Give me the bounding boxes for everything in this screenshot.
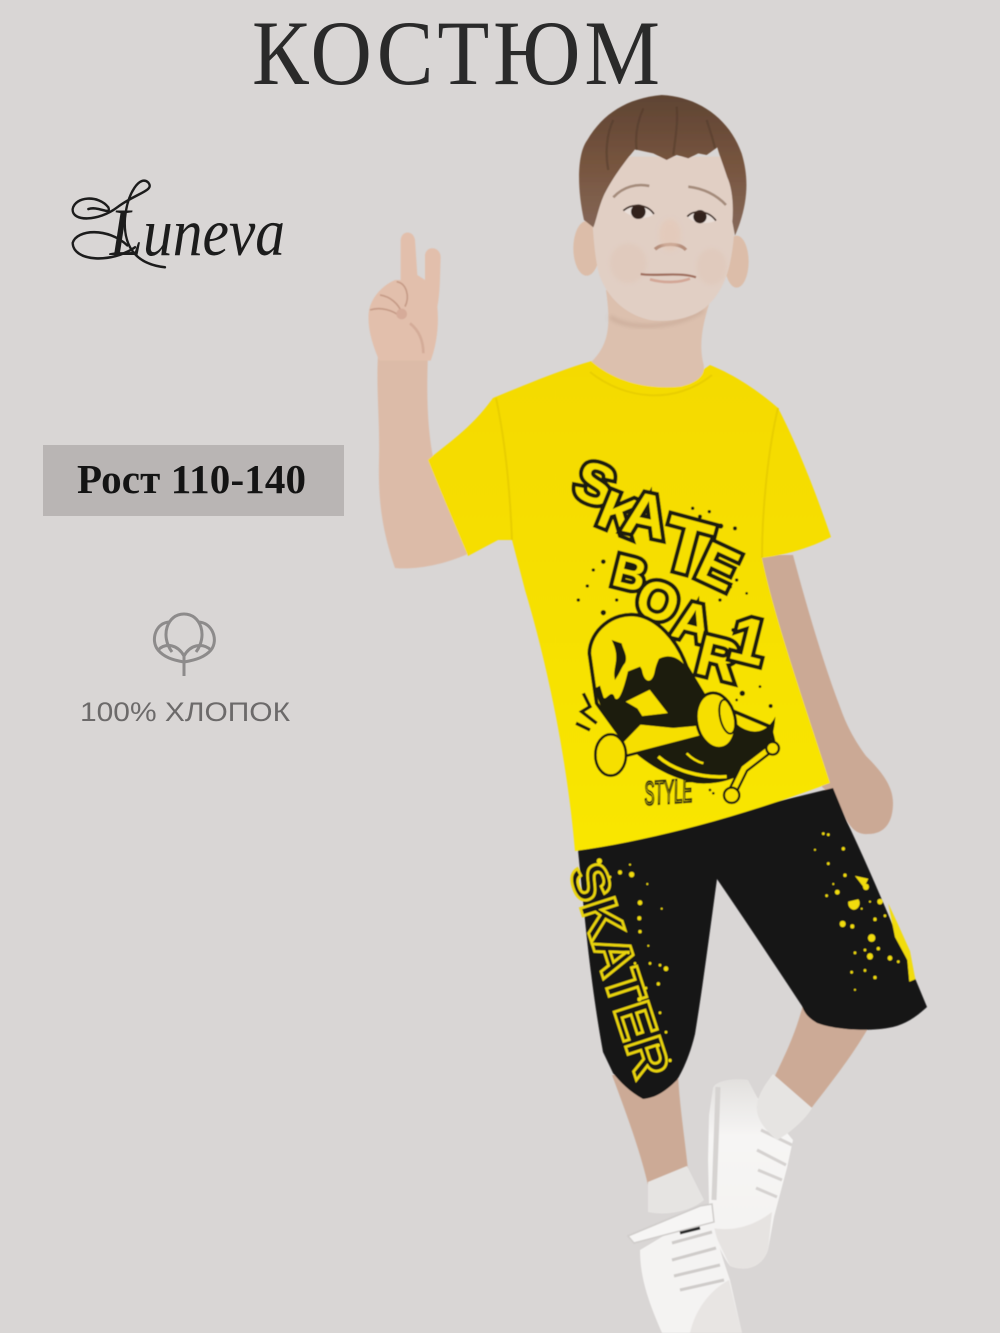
legs bbox=[612, 1005, 870, 1185]
paint splatter left leg bbox=[597, 858, 672, 1062]
back shoe bbox=[708, 1079, 793, 1269]
graffiti letters: A bbox=[667, 590, 718, 656]
graffiti letters: K bbox=[590, 480, 648, 549]
nose bbox=[655, 244, 686, 250]
head bbox=[573, 95, 749, 321]
face bbox=[591, 157, 735, 321]
skateboard bbox=[576, 615, 779, 803]
front sock bbox=[648, 1166, 704, 1214]
graffiti letters: S bbox=[566, 449, 623, 521]
hair bbox=[579, 95, 746, 236]
t-shirt skateboard print bbox=[566, 449, 779, 813]
yellow t-shirt bbox=[428, 361, 831, 851]
print splatter bbox=[577, 507, 773, 795]
shorts print bbox=[557, 832, 915, 1085]
title: КОСТЮМ bbox=[252, 3, 660, 105]
material label: 100% ХЛОПОК bbox=[80, 697, 290, 727]
mouth bbox=[641, 274, 696, 277]
eyes bbox=[623, 204, 716, 223]
graffiti letters: E bbox=[687, 531, 748, 604]
size label panel bbox=[43, 445, 344, 516]
back sock bbox=[757, 1074, 812, 1140]
raised arm bbox=[377, 355, 472, 568]
graffiti letters: O bbox=[628, 567, 687, 637]
eyebrows bbox=[613, 185, 726, 205]
right arm and hand bbox=[745, 555, 893, 834]
brand logo: Luneva bbox=[73, 181, 285, 270]
brand logo: Luneva: L bbox=[109, 194, 143, 270]
front shoe bbox=[628, 1204, 742, 1333]
brand logo: Luneva: uneva bbox=[143, 194, 285, 270]
graffiti letters: T bbox=[653, 500, 720, 594]
paint splatter right leg bbox=[814, 832, 915, 991]
photo: boy in yellow t-shirt and black shorts bbox=[368, 95, 927, 1333]
graffiti lettering on left leg: SKATER bbox=[557, 856, 680, 1085]
icon: cotton flower bbox=[154, 614, 214, 676]
neck bbox=[592, 290, 712, 387]
graffiti letters: R bbox=[690, 624, 745, 695]
graffiti letters bbox=[566, 449, 774, 695]
graffiti letters: 1 bbox=[723, 603, 774, 679]
graffiti letters: A bbox=[618, 478, 674, 552]
size label panel: Рост 110-140 bbox=[77, 456, 306, 502]
black shorts bbox=[578, 788, 927, 1099]
ears bbox=[573, 221, 600, 276]
t-shirt skateboard print: STYLE bbox=[643, 773, 694, 813]
raised hand bbox=[368, 232, 441, 361]
shirt seams and collar bbox=[496, 372, 778, 558]
graffiti letters: B bbox=[608, 545, 652, 602]
